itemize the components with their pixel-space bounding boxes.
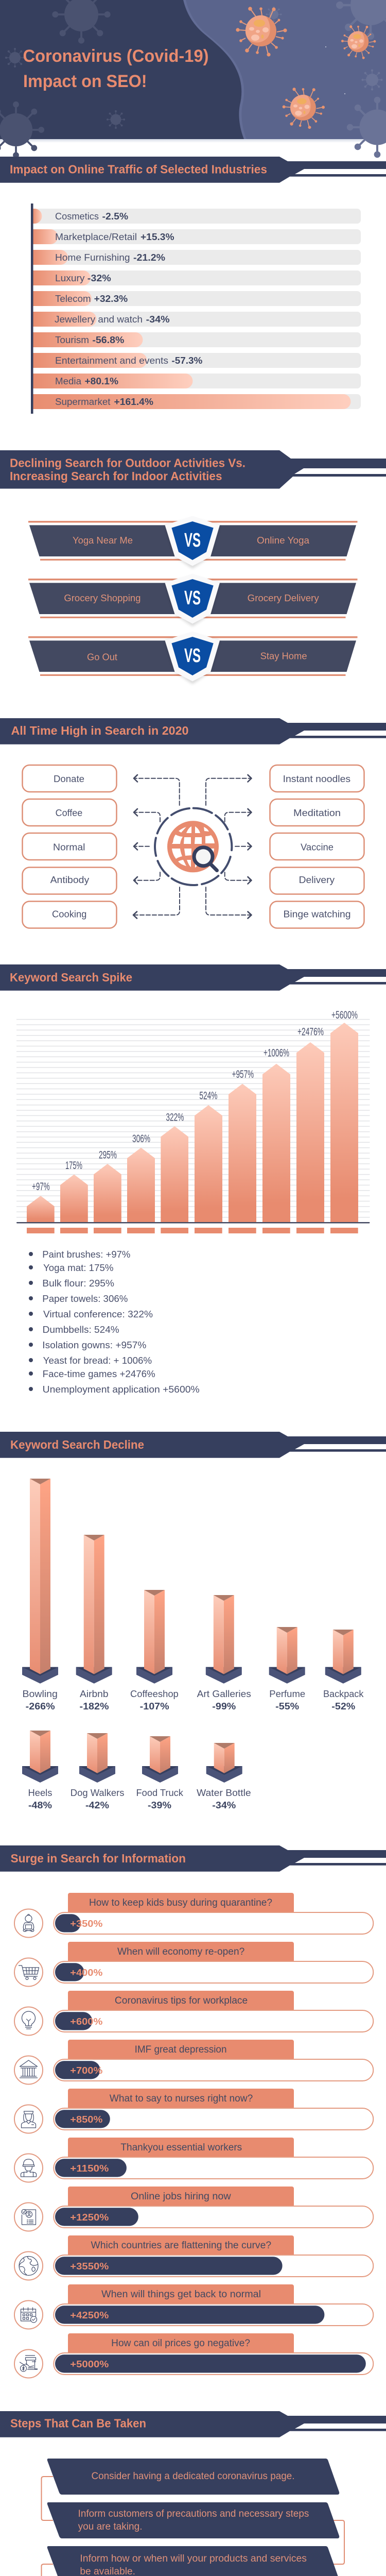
bar chart: online traffic by industry: -57.3% bbox=[171, 355, 202, 366]
chart: keyword search spike: +2476% bbox=[297, 1026, 324, 1038]
surge row: back to normal: When will things get back to normal bbox=[101, 2289, 261, 2300]
bar chart: online traffic by industry: -34% bbox=[146, 314, 170, 325]
surge row: nurses bbox=[14, 2089, 373, 2133]
heading: keyword search spike bbox=[0, 964, 386, 991]
icon: oil barrels and falling chart bbox=[20, 2355, 37, 2371]
surge row: economy: When will economy re-open? bbox=[117, 1946, 244, 1957]
bar chart: online traffic by industry: Cosmetics bbox=[55, 211, 99, 222]
surge row: kids: How to keep kids busy during quarantine? bbox=[89, 1897, 272, 1908]
versus row: yoga: Yoga Near Me bbox=[73, 535, 133, 546]
step 2: Inform customers of precautions and necessary steps bbox=[78, 2508, 309, 2519]
chart: keyword search decline row one: -99% bbox=[212, 1701, 236, 1711]
search terms right column: Meditation bbox=[293, 808, 341, 818]
search terms left column bbox=[23, 765, 116, 928]
icon: resume bbox=[22, 2209, 36, 2225]
heading: declining outdoor vs increasing indoor: Declining Search for Outdoor Activities Vs. bbox=[10, 456, 245, 470]
surge row: nurses: What to say to nurses right now? bbox=[110, 2093, 253, 2104]
surge row: workplace tips: Coronavirus tips for workplace bbox=[115, 1995, 248, 2006]
chart: keyword search decline row two: -34% bbox=[212, 1800, 236, 1810]
surge row: kids bbox=[14, 1893, 373, 1937]
bar chart: online traffic by industry: +32.3% bbox=[94, 294, 128, 304]
chart: keyword search decline row one: -107% bbox=[140, 1701, 169, 1711]
chart: keyword search decline row one: -55% bbox=[275, 1701, 299, 1711]
surge row: imf: IMF great depression bbox=[135, 2044, 226, 2055]
search terms left column: Antibody bbox=[50, 875, 89, 885]
bar chart: online traffic by industry: +80.1% bbox=[84, 376, 118, 386]
bullet list: keyword spikes bbox=[29, 1249, 200, 1395]
bullet list: keyword spikes: Yoga mat: 175% bbox=[43, 1263, 113, 1273]
surge row: online jobs bbox=[14, 2187, 373, 2231]
versus row: yoga bbox=[28, 516, 357, 569]
search terms left column: Coffee bbox=[56, 808, 82, 818]
chart: keyword search decline row two: -48% bbox=[28, 1800, 52, 1810]
surge row: kids: +350% bbox=[70, 1919, 102, 1929]
surge row: workplace tips bbox=[14, 1991, 373, 2035]
icon: globe with magnifier bbox=[155, 808, 232, 885]
icon: nurse bbox=[22, 2111, 36, 2128]
title bbox=[23, 46, 209, 91]
chart: keyword search decline row one: Bowling bbox=[23, 1689, 58, 1699]
dashed arrows from globe bbox=[133, 775, 251, 918]
bullet list: keyword spikes: Dumbbells: 524% bbox=[43, 1325, 119, 1335]
heading: surge in search for information: Surge in Search for Information bbox=[10, 1852, 186, 1865]
icon: construction worker bbox=[21, 2159, 36, 2177]
heading: impact on online traffic: Impact on Online Traffic of Selected Industries bbox=[10, 163, 267, 176]
bar chart: online traffic by industry: -2.5% bbox=[102, 211, 128, 222]
bullet list: keyword spikes: Unemployment application +5600% bbox=[43, 1384, 200, 1395]
bar chart: online traffic by industry: Entertainment and events bbox=[55, 355, 168, 366]
versus row: grocery bbox=[28, 574, 357, 626]
surge row: oil prices: How can oil prices go negative? bbox=[111, 2338, 250, 2349]
bullet list: keyword spikes: Face-time games +2476% bbox=[43, 1369, 155, 1379]
step 1 bbox=[47, 2459, 339, 2495]
bullet list: keyword spikes: Virtual conference: 322% bbox=[43, 1309, 153, 1319]
versus row: grocery: VS bbox=[184, 587, 201, 609]
versus row: grocery: Grocery Shopping bbox=[64, 593, 141, 603]
chart: keyword search spike: 524% bbox=[199, 1090, 217, 1102]
surge row: flattening the curve bbox=[14, 2235, 373, 2280]
chart: keyword search decline row two bbox=[22, 1731, 251, 1810]
bar chart: online traffic by industry: Tourism bbox=[55, 335, 89, 345]
versus row: yoga: Online Yoga bbox=[257, 535, 310, 546]
surge row: oil prices bbox=[14, 2333, 373, 2378]
bar chart: online traffic by industry: -32% bbox=[87, 273, 111, 283]
search terms right column: Instant noodles bbox=[283, 774, 350, 784]
surge row: flattening the curve: +3550% bbox=[70, 2261, 109, 2272]
bar chart: online traffic by industry: Marketplace/Retail bbox=[55, 232, 137, 242]
surge row: essential workers: +1150% bbox=[70, 2163, 109, 2174]
surge row: back to normal bbox=[14, 2284, 373, 2329]
icon: earth bbox=[19, 2257, 38, 2275]
chart: keyword search decline row one: -182% bbox=[79, 1701, 109, 1711]
chart: keyword search decline row one: Backpack bbox=[323, 1689, 364, 1699]
chart: keyword search spike: 295% bbox=[99, 1149, 117, 1161]
bar chart: online traffic by industry: Telecom bbox=[55, 294, 91, 304]
chart: keyword search decline row two: -39% bbox=[148, 1800, 171, 1810]
chart: keyword search decline row one: Airbnb bbox=[80, 1689, 108, 1699]
versus row: go out: Go Out bbox=[87, 652, 117, 663]
search terms right column: Delivery bbox=[299, 875, 335, 885]
heading: steps that can be taken: Steps That Can Be Taken bbox=[10, 2417, 146, 2430]
heading: steps that can be taken bbox=[0, 2411, 386, 2437]
chart: keyword search decline row one: -266% bbox=[26, 1701, 55, 1711]
bar chart: online traffic by industry: Jewellery and watch bbox=[55, 314, 143, 325]
icon: bank bbox=[20, 2060, 37, 2078]
bar chart: online traffic by industry: Supermarket bbox=[55, 397, 110, 407]
bar chart: online traffic by industry: Home Furnishing bbox=[55, 252, 130, 263]
bar chart: online traffic by industry: +161.4% bbox=[114, 397, 153, 407]
heading: keyword search spike: Keyword Search Spike bbox=[10, 971, 132, 984]
chart: keyword search decline row two: -42% bbox=[85, 1800, 109, 1810]
surge row: imf: +700% bbox=[70, 2065, 102, 2076]
icon: calendar bbox=[21, 2308, 37, 2323]
surge row: back to normal: +4250% bbox=[70, 2310, 109, 2320]
heading: keyword search decline bbox=[0, 1432, 386, 1458]
search terms left column: Normal bbox=[53, 842, 85, 852]
versus row: yoga: VS bbox=[184, 530, 201, 551]
versus row: go out: Stay Home bbox=[260, 651, 307, 662]
chart: keyword search decline row one: -52% bbox=[331, 1701, 355, 1711]
bullet list: keyword spikes: Paint brushes: +97% bbox=[42, 1249, 130, 1260]
bar chart: online traffic by industry: -56.8% bbox=[92, 335, 124, 345]
bar chart: online traffic by industry: +15.3% bbox=[141, 232, 174, 242]
heading: declining outdoor vs increasing indoor bbox=[0, 450, 386, 488]
surge row: oil prices: +5000% bbox=[70, 2359, 109, 2369]
surge row: economy: +400% bbox=[70, 1968, 102, 1978]
bar chart: online traffic by industry: Media bbox=[55, 376, 82, 386]
surge row: flattening the curve: Which countries are flattening the curve? bbox=[91, 2240, 271, 2251]
bar chart: online traffic by industry: Luxury bbox=[55, 273, 84, 283]
hero banner bbox=[0, 0, 386, 158]
search terms right column: Binge watching bbox=[283, 909, 351, 920]
bullet list: keyword spikes: Yeast for bread: + 1006% bbox=[43, 1355, 152, 1366]
icon: light bulb bbox=[22, 2011, 35, 2029]
chart: keyword search spike: 306% bbox=[132, 1133, 150, 1145]
search terms left column: Donate bbox=[54, 774, 84, 784]
icon: baby bbox=[23, 1914, 34, 1931]
faded virus shapes bbox=[0, 0, 386, 158]
chart: keyword search decline row two: Food Truck bbox=[136, 1788, 184, 1798]
step 2 bbox=[47, 2502, 339, 2538]
bar chart: online traffic by industry bbox=[31, 204, 361, 414]
step 2: you are taking. bbox=[78, 2521, 142, 2532]
surge row: essential workers bbox=[14, 2138, 373, 2182]
chart: keyword search spike: +5600% bbox=[331, 1009, 358, 1021]
surge row: nurses: +850% bbox=[70, 2114, 102, 2125]
icon: shopping cart bbox=[19, 1965, 39, 1979]
title: Coronavirus (Covid-19) bbox=[23, 46, 209, 66]
chart: keyword search decline row one: Perfume bbox=[269, 1689, 305, 1699]
step 3: Inform how or when will your products and services bbox=[80, 2553, 307, 2564]
chart: keyword search spike: 322% bbox=[166, 1112, 184, 1123]
heading: all time high: All Time High in Search in 2020 bbox=[11, 724, 188, 737]
chart: keyword search spike: +957% bbox=[232, 1069, 254, 1080]
surge row: economy bbox=[14, 1942, 373, 1987]
virus illustrations bbox=[236, 7, 376, 129]
versus row: grocery: Grocery Delivery bbox=[248, 593, 319, 603]
surge row: imf bbox=[14, 2040, 373, 2084]
heading: all time high bbox=[0, 718, 386, 744]
bullet list: keyword spikes: Bulk flour: 295% bbox=[42, 1278, 114, 1289]
search terms right column: Vaccine bbox=[301, 842, 334, 852]
chart: keyword search decline row two: Heels bbox=[28, 1788, 52, 1798]
heading: surge in search for information bbox=[0, 1845, 386, 1872]
step 1: Consider having a dedicated coronavirus page. bbox=[92, 2470, 294, 2482]
surge row: workplace tips: +600% bbox=[70, 2016, 102, 2027]
chart: keyword search decline row two: Water Bottle bbox=[197, 1788, 251, 1798]
step 3 bbox=[47, 2546, 339, 2576]
search terms right column bbox=[270, 765, 364, 928]
chart: keyword search decline row one: Art Galleries bbox=[197, 1689, 251, 1699]
chart: keyword search decline row two: Dog Walkers bbox=[71, 1788, 125, 1798]
search terms left column: Cooking bbox=[52, 909, 86, 920]
bar chart: online traffic by industry: -21.2% bbox=[133, 252, 165, 263]
chart: keyword search spike: +97% bbox=[32, 1181, 50, 1193]
heading: declining outdoor vs increasing indoor: Increasing Search for Indoor Activities bbox=[10, 469, 222, 483]
surge row: online jobs: Online jobs hiring now bbox=[131, 2191, 231, 2202]
versus row: go out bbox=[28, 632, 357, 684]
bullet list: keyword spikes: Isolation gowns: +957% bbox=[42, 1340, 146, 1350]
connectors between steps bbox=[41, 2477, 344, 2576]
chart: keyword search spike: 175% bbox=[65, 1160, 82, 1172]
surge row: essential workers: Thankyou essential workers bbox=[120, 2142, 242, 2153]
bullet list: keyword spikes: Paper towels: 306% bbox=[42, 1294, 128, 1304]
chart: keyword search spike: +1006% bbox=[264, 1047, 289, 1059]
heading: keyword search decline: Keyword Search Decline bbox=[10, 1438, 144, 1451]
chart: keyword search spike bbox=[16, 1009, 370, 1233]
title: Impact on SEO! bbox=[23, 72, 147, 91]
surge row: online jobs: +1250% bbox=[70, 2212, 109, 2223]
chart: keyword search decline row one bbox=[22, 1479, 364, 1711]
chart: keyword search decline row one: Coffeeshop bbox=[130, 1689, 179, 1699]
versus row: go out: VS bbox=[184, 645, 201, 667]
heading: impact on online traffic bbox=[0, 157, 386, 183]
